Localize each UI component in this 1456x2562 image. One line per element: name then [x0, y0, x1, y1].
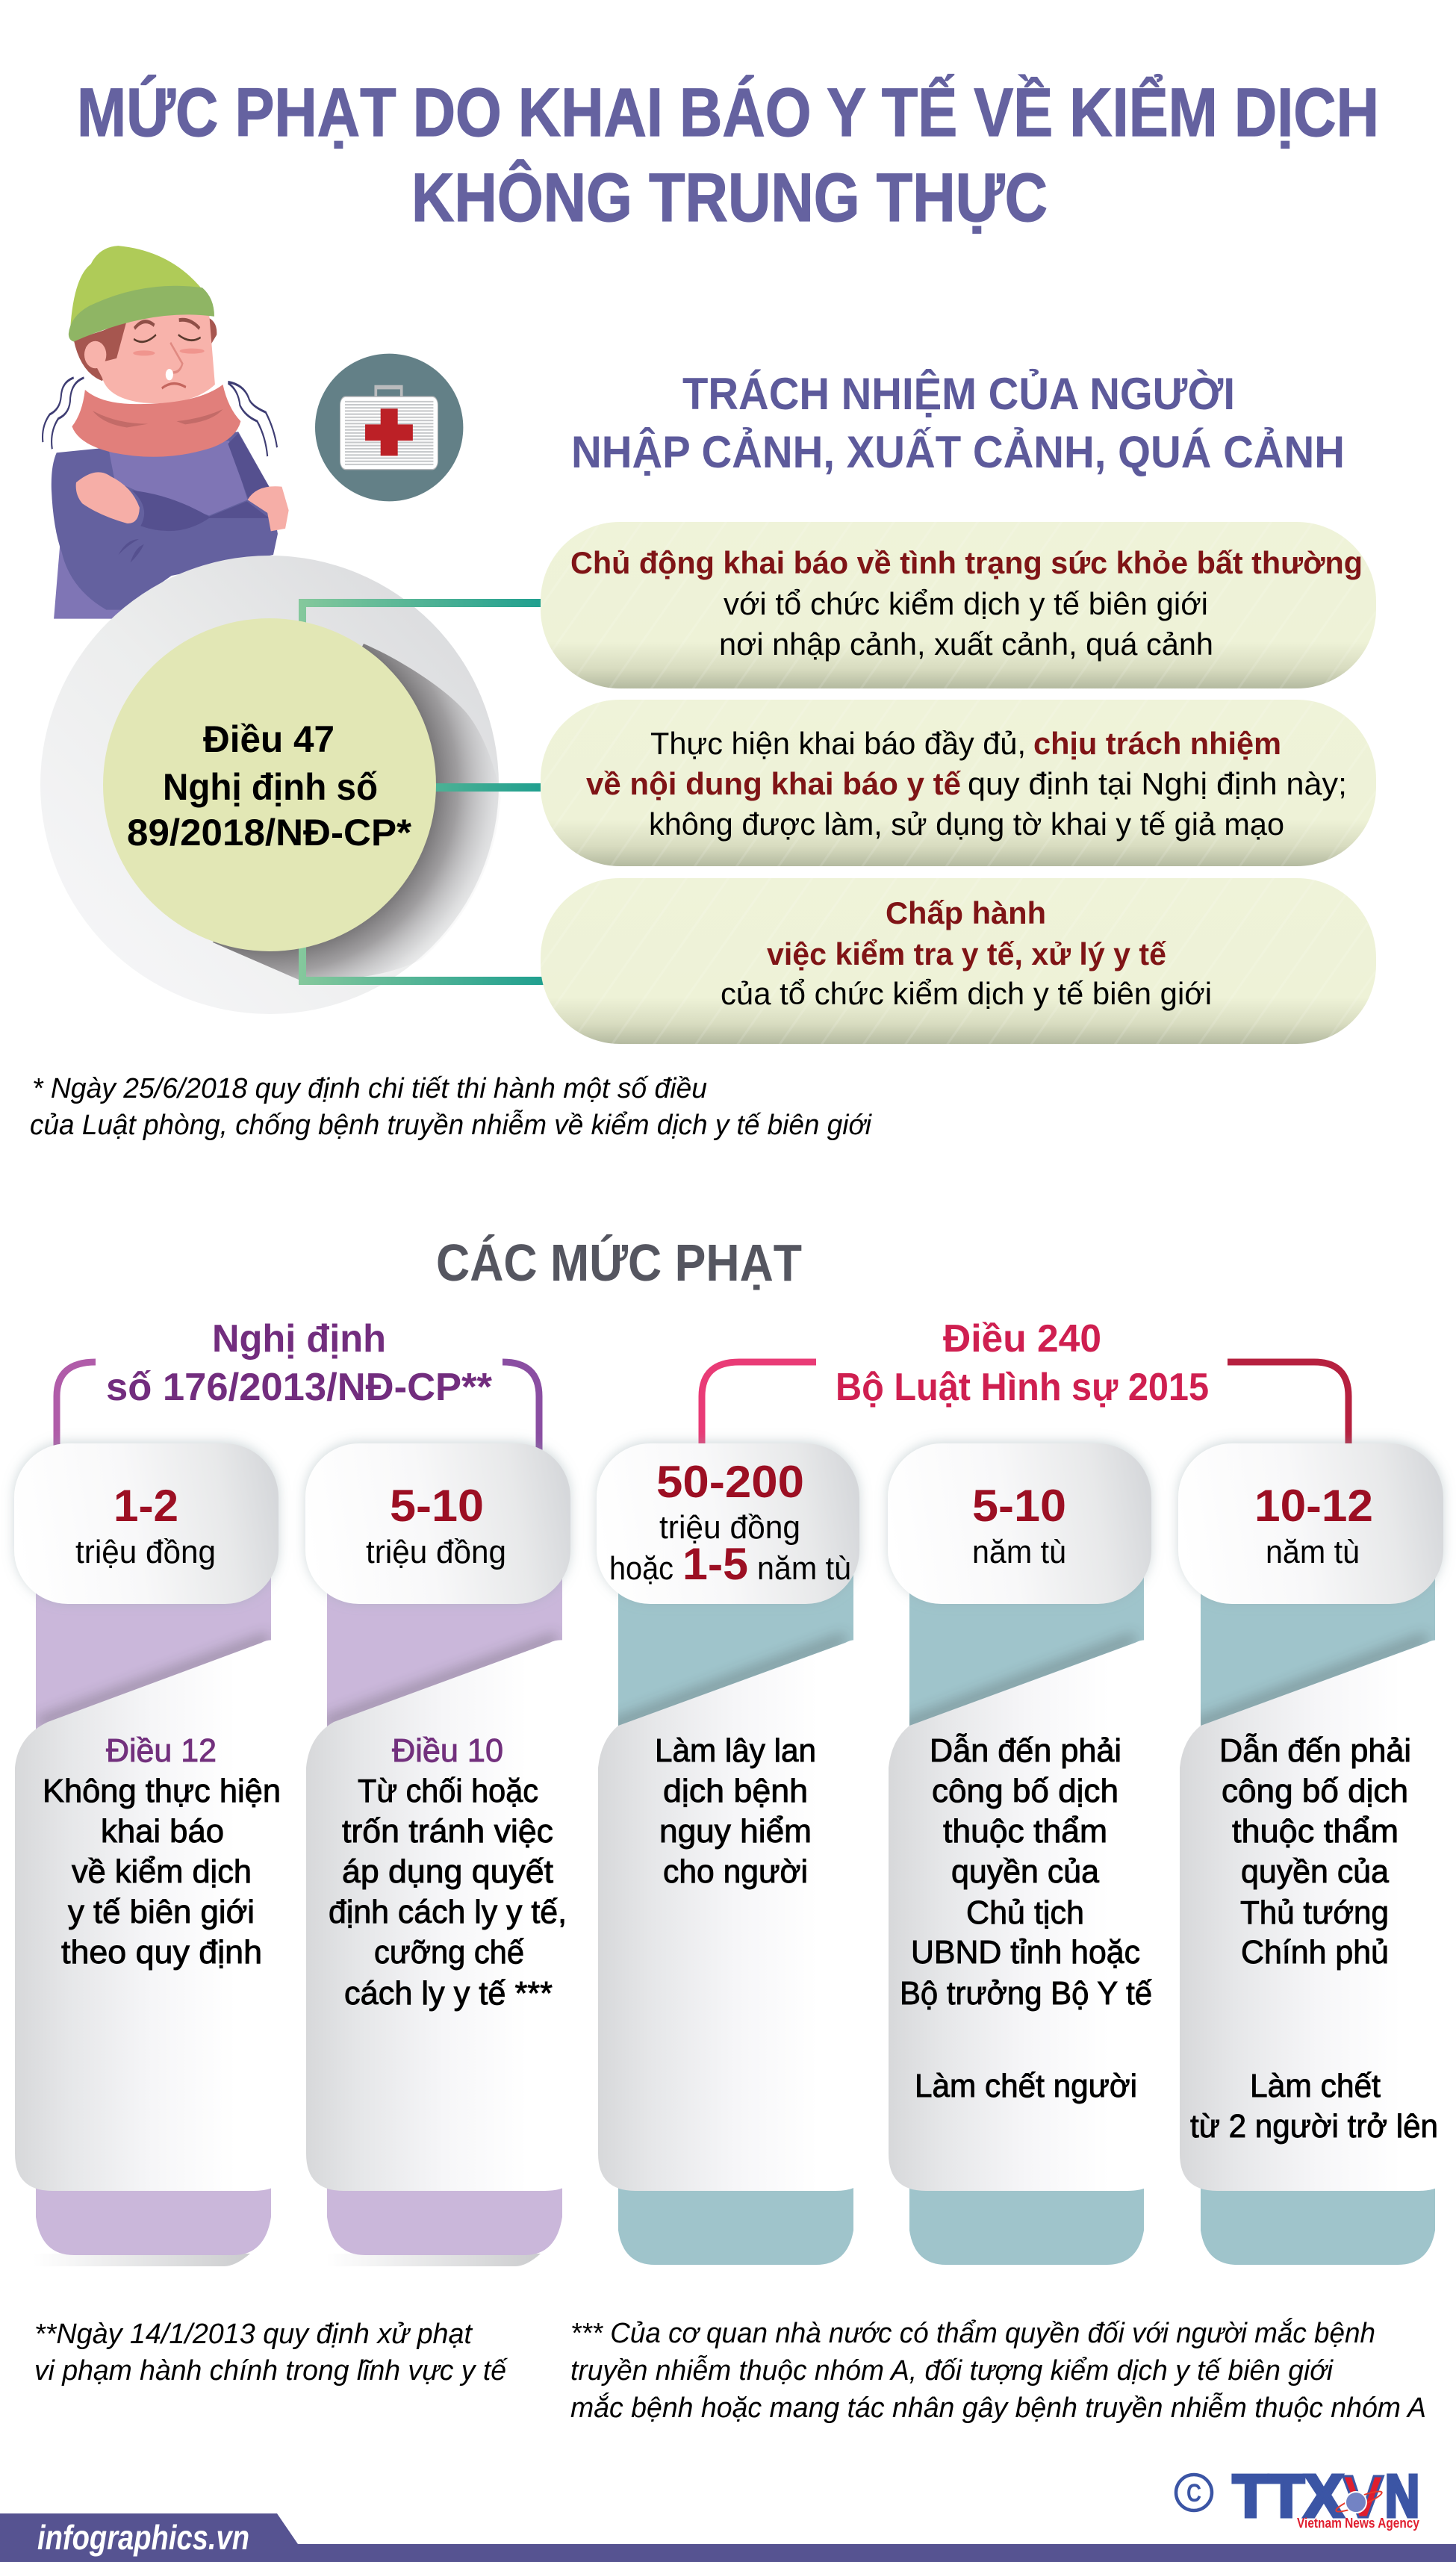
logo: TTXVN Vietnam News Agency	[1233, 2463, 1419, 2531]
panel: penalty column 2: cách ly y tế ***	[344, 1975, 553, 2012]
panel: responsibility 1: với tổ chức kiểm dịch y tế biên giới	[724, 586, 1208, 621]
panel: responsibility 3: Chấp hành	[886, 895, 1046, 930]
panel: penalty column 2: Điều 10	[392, 1732, 503, 1769]
panel: penalty column 3: hoặc	[609, 1550, 673, 1587]
heading: article 240 with bracket: Bộ Luật Hình sự 2015	[836, 1366, 1209, 1409]
panel: responsibility 2: về nội dung khai báo y tế	[586, 766, 962, 801]
panel: penalty column 1: Điều 12	[106, 1732, 217, 1769]
panel: penalty column 2: áp dụng quyết	[342, 1853, 553, 1890]
panel: penalty column 2	[305, 1443, 582, 2266]
panel: responsibility 1: nơi nhập cảnh, xuất cảnh, quá cảnh	[719, 626, 1213, 662]
panel: responsibility 2: chịu trách nhiệm	[1033, 726, 1281, 761]
panel: penalty column 2: định cách ly y tế,	[329, 1894, 567, 1930]
panel: penalty column 1: Không thực hiện	[43, 1773, 281, 1809]
heading: decree 176 with bracket: số 176/2013/NĐ-CP**	[106, 1366, 493, 1409]
panel: penalty column 5: Chính phủ	[1241, 1934, 1389, 1971]
panel: penalty column 5: thuộc thẩm	[1232, 1813, 1399, 1850]
panel: penalty column 5: Thủ tướng	[1240, 1894, 1389, 1931]
heading: responsibilities: TRÁCH NHIỆM CỦA NGƯỜI	[682, 369, 1235, 419]
panel: penalty column 3: cho người	[663, 1853, 808, 1890]
panel: penalty column 4: Chủ tịch	[966, 1894, 1084, 1931]
panel: penalty column 1: 1-2	[113, 1481, 178, 1531]
title	[77, 73, 1379, 236]
panel: responsibility 3	[541, 878, 1376, 1044]
logo: TTXVN Vietnam News Agency: TTX	[1233, 2463, 1343, 2529]
panel: penalty column 2: cưỡng chế	[374, 1934, 524, 1971]
panel: penalty column 1: y tế biên giới	[68, 1894, 255, 1930]
heading: decree 176 with bracket: Nghị định	[212, 1317, 386, 1361]
icon: copyright: C	[1186, 2479, 1201, 2507]
panel: penalty column 5: Dẫn đến phải	[1219, 1732, 1411, 1769]
logo: TTXVN Vietnam News Agency: V	[1343, 2463, 1384, 2530]
panel: penalty column 4: quyền của	[951, 1853, 1100, 1890]
panel: penalty column 4	[888, 1443, 1165, 2265]
footnote: competent authority: truyền nhiễm thuộc nhóm A, đối tượng kiểm dịch y tế biên giới	[570, 2354, 1334, 2387]
footnote: decree 89: của Luật phòng, chống bệnh truyền nhiễm về kiểm dịch y tế biên giới	[30, 1108, 873, 1141]
panel: article 47 circle: Điều 47	[203, 718, 335, 760]
panel: responsibility 2: không được làm, sử dụng tờ khai y tế giả mạo	[649, 806, 1284, 842]
panel: penalty column 3: dịch bệnh	[663, 1773, 808, 1809]
heading: responsibilities	[571, 369, 1345, 477]
panel: penalty column 3: triệu đồng	[659, 1509, 800, 1546]
heading: responsibilities: NHẬP CẢNH, XUẤT CẢNH, QUÁ CẢNH	[571, 427, 1345, 477]
heading: decree 176 with bracket	[57, 1317, 539, 1452]
heading: penalty levels: CÁC MỨC PHẠT	[436, 1234, 802, 1292]
heading: article 240 with bracket	[702, 1317, 1348, 1449]
panel: responsibility 2: quy định tại Nghị định này;	[968, 766, 1347, 801]
icon: copyright	[1176, 2475, 1212, 2510]
panel: penalty column 4: Làm chết người	[915, 2068, 1137, 2104]
footnote: competent authority	[570, 2317, 1426, 2424]
footnote: competent authority: mắc bệnh hoặc mang tác nhân gây bệnh truyền nhiễm thuộc nhóm A	[570, 2391, 1426, 2424]
panel: penalty column 3: 50-200	[656, 1457, 804, 1507]
panel: penalty column 5	[1178, 1443, 1456, 2265]
panel: penalty column 5: quyền của	[1241, 1853, 1390, 1890]
illustration: sick man in winter hat and scarf	[43, 246, 289, 619]
panel: article 47 circle: 89/2018/NĐ-CP*	[127, 812, 412, 854]
panel: penalty column 1: khai báo	[101, 1813, 224, 1850]
panel: penalty column 3: 1-5	[682, 1539, 748, 1589]
panel: penalty column 2: Từ chối hoặc	[358, 1773, 538, 1809]
panel: penalty column 3	[597, 1443, 873, 2265]
panel: responsibility 1	[541, 522, 1376, 688]
panel: penalty column 5: công bố dịch	[1222, 1773, 1408, 1809]
panel: penalty column 2: trốn tránh việc	[342, 1813, 553, 1850]
panel: penalty column 5: Làm chết	[1250, 2068, 1381, 2104]
footnote: decree 176: **Ngày 14/1/2013 quy định xử phạt	[34, 2319, 473, 2350]
panel: article 47 circle: Nghị định số	[163, 766, 378, 808]
panel: responsibility 1: Chủ động khai báo về tình trạng sức khỏe bất thường	[570, 545, 1363, 580]
footnote: decree 89: * Ngày 25/6/2018 quy định chi tiết thi hành một số điều	[32, 1073, 707, 1104]
logo: TTXVN Vietnam News Agency: Vietnam News Agency	[1297, 2516, 1419, 2531]
panel: penalty column 3: năm tù	[757, 1550, 851, 1587]
panel: penalty column 3: nguy hiểm	[659, 1813, 812, 1850]
panel: penalty column 4: năm tù	[972, 1534, 1066, 1570]
panel: responsibility 2	[541, 700, 1376, 866]
panel: penalty column 5: 10-12	[1254, 1481, 1373, 1531]
panel: penalty column 5: từ 2 người trở lên	[1190, 2108, 1438, 2145]
panel: penalty column 1: theo quy định	[61, 1934, 262, 1971]
panel: penalty column 2: 5-10	[390, 1481, 484, 1531]
panel: penalty column 3: Làm lây lan	[655, 1732, 816, 1769]
panel: article 47 circle	[40, 556, 545, 1014]
panel: penalty column 4: công bố dịch	[932, 1773, 1119, 1809]
panel: penalty column 1: triệu đồng	[75, 1534, 216, 1570]
heading: article 240 with bracket: Điều 240	[943, 1317, 1101, 1361]
footnote: decree 176	[34, 2319, 508, 2387]
footer bar with site name	[0, 2513, 1456, 2562]
title: KHÔNG TRUNG THỰC	[411, 159, 1048, 236]
panel: penalty column 4: Dẫn đến phải	[930, 1732, 1121, 1769]
footer bar with site name: infographics.vn	[37, 2518, 249, 2557]
panel: penalty column 1	[14, 1443, 291, 2266]
panel: penalty column 5: năm tù	[1266, 1534, 1360, 1570]
panel: responsibility 3: việc kiểm tra y tế, xử lý y tế	[767, 936, 1167, 971]
panel: penalty column 4: UBND tỉnh hoặc	[911, 1934, 1140, 1971]
footnote: decree 176: vi phạm hành chính trong lĩnh vực y tế	[34, 2355, 508, 2387]
panel: penalty column 4: Bộ trưởng Bộ Y tế	[900, 1975, 1152, 2012]
logo: TTXVN Vietnam News Agency: N	[1385, 2463, 1419, 2529]
icon: medical first-aid kit	[315, 354, 463, 501]
footnote: competent authority: *** Của cơ quan nhà nước có thẩm quyền đối với người mắc bệnh	[570, 2317, 1375, 2349]
panel: penalty column 4: thuộc thẩm	[943, 1813, 1107, 1850]
panel: responsibility 2: Thực hiện khai báo đầy đủ,	[650, 726, 1026, 761]
panel: penalty column 1: về kiểm dịch	[72, 1853, 252, 1890]
footnote: decree 89	[30, 1073, 873, 1141]
panel: penalty column 4: 5-10	[972, 1481, 1066, 1531]
panel: penalty column 2: triệu đồng	[366, 1534, 506, 1570]
panel: responsibility 3: của tổ chức kiểm dịch y tế biên giới	[721, 976, 1212, 1011]
